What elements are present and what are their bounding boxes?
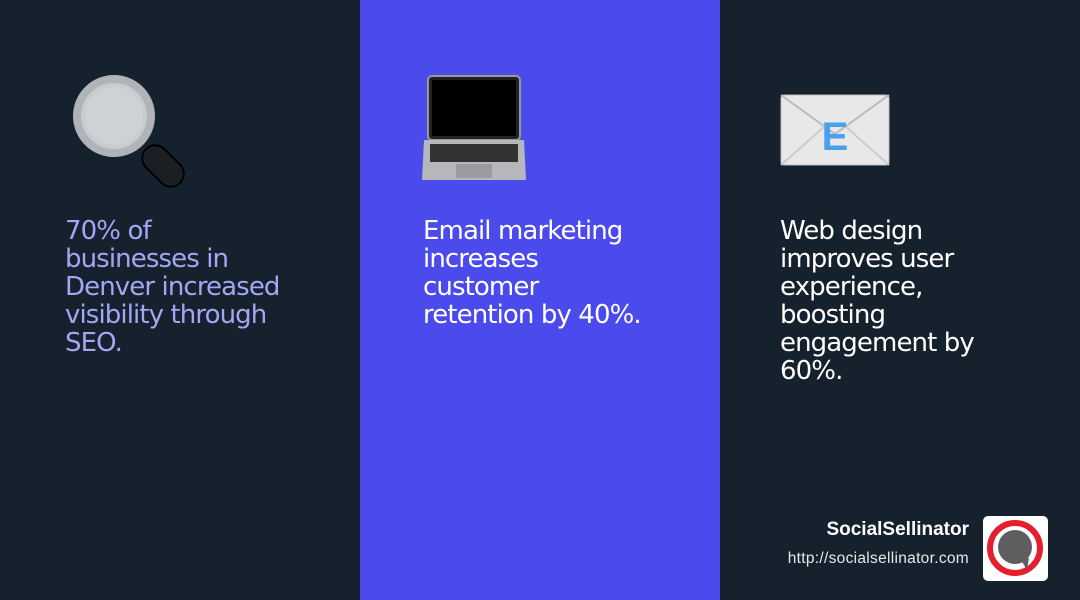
text: web design stat: engagement by — [780, 328, 974, 358]
text: seo stat — [65, 216, 280, 358]
text: email stat: increases — [423, 244, 538, 274]
text: web design stat: boosting — [780, 300, 885, 330]
icon: envelope: E — [822, 115, 848, 159]
text: seo stat: SEO. — [65, 328, 122, 358]
text: web design stat: 60%. — [780, 356, 842, 386]
text: web design stat: improves user — [780, 244, 953, 274]
text: email stat — [423, 216, 641, 330]
text: seo stat: 70% of — [65, 216, 151, 246]
text: web design stat: experience, — [780, 272, 922, 302]
panel: seo — [0, 0, 360, 600]
logo — [983, 516, 1048, 581]
brand url: http://socialsellinator.com — [788, 550, 969, 567]
panel: email — [360, 0, 720, 600]
panel: web design — [720, 0, 1080, 600]
text: web design stat: Web design — [780, 216, 922, 246]
icon: laptop — [422, 75, 526, 180]
text: seo stat: businesses in — [65, 244, 228, 274]
brand name: SocialSellinator — [826, 519, 969, 540]
text: seo stat: Denver increased — [65, 272, 280, 302]
text: email stat: customer — [423, 272, 538, 302]
text: seo stat: visibility through — [65, 300, 266, 330]
icon: magnifying glass — [73, 75, 185, 188]
text: web design stat — [780, 216, 974, 386]
brand block — [788, 516, 1048, 581]
text: email stat: Email marketing — [423, 216, 622, 246]
text: email stat: retention by 40%. — [423, 300, 641, 330]
icon: envelope — [780, 94, 890, 166]
